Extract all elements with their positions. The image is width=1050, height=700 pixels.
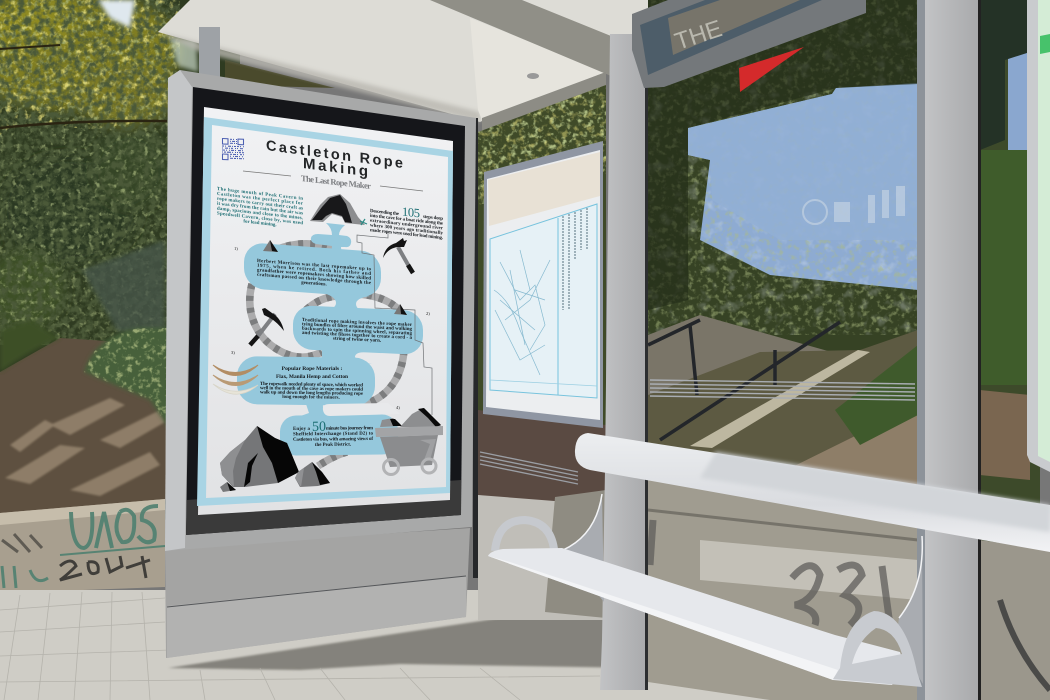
centre shelter column: [600, 34, 648, 690]
poster: steps fact text: extraordinary underground river: [370, 219, 444, 232]
background: paved sidewalk: [0, 590, 1050, 700]
electronic display sign: THE: [672, 15, 726, 56]
poster: connector line: [357, 233, 432, 415]
poster: rock on rope 1 dark side: [270, 240, 278, 252]
poster: traditional rope making text: backwards to spin the spinning wheel, separating: [302, 327, 413, 337]
poster: intro text: damp, spacious and close to the mines.: [217, 207, 304, 221]
poster: bus journey text: Castleton via bus, with amazing views of: [293, 437, 373, 443]
bench back rail: [575, 433, 1050, 552]
roof support post: [199, 27, 220, 77]
poster: Herbert Morrison text: craftsman passed on their knowledge through the: [257, 273, 372, 286]
poster kiosk: base: [165, 528, 470, 658]
poster: steps fact text: where 300 years ago traditionally: [370, 223, 444, 236]
poster: subtitle with rules: The Last Rope Maker: [301, 173, 371, 191]
poster: step number 1: 1): [234, 246, 238, 251]
poster: bus journey text: Enjoy a: [293, 427, 311, 432]
poster: steps fact text: steps deep: [423, 215, 443, 222]
bench seat: [488, 548, 905, 685]
poster: white cut-out between panels: [323, 403, 400, 416]
poster: blue border: [197, 117, 453, 506]
poster: rope materials text: long enough for the miners.: [282, 395, 340, 401]
poster kiosk: frame highlight: [165, 70, 192, 551]
poster: intro text: for lead mining.: [243, 219, 277, 228]
poster kiosk: silver frame: [165, 70, 476, 551]
poster: step number 2: 2): [426, 311, 430, 316]
poster: rope: [250, 244, 404, 466]
poster: traditional rope making text: tying bundles of fibre around the waist and walking: [302, 322, 413, 332]
poster: steps fact text: [370, 201, 444, 241]
poster: small boulder: [295, 462, 330, 487]
poster: traditional rope making text: string of twine or yarn.: [333, 337, 381, 344]
poster: blue connected panels: [237, 223, 423, 456]
poster kiosk: dark glass interior: [186, 87, 465, 535]
poster: bus journey text: the Peak District.: [315, 443, 351, 448]
poster: step number 4: 4): [396, 405, 400, 410]
poster: intro text: [217, 187, 304, 231]
bus shelter roof: [158, 0, 660, 132]
poster: Herbert Morrison text: 1975, when he retired. Both his father and: [257, 264, 371, 277]
red flag: [739, 47, 804, 92]
poster: intro text: rope makers to carry out their craft as: [217, 197, 303, 212]
poster: bus journey text: 50: [312, 420, 326, 435]
background: sloped ground and bush: [0, 320, 175, 514]
background: trees and sky: [0, 0, 335, 520]
poster: cave illustration: [310, 194, 367, 225]
poster: Herbert Morrison text: grandfather were ropemakers showing how skilled: [257, 268, 371, 282]
poster: white sheet: [198, 107, 453, 515]
poster: rock on rope 1: [263, 240, 278, 252]
background: fence: [82, 240, 165, 332]
poster: steps fact text: Descending the: [370, 209, 400, 217]
poster: bus journey text: [293, 419, 374, 448]
poster: rope materials text: The ropewalk needed plenty of space, which worked: [260, 382, 363, 388]
far right ad panel edge: [1027, 0, 1050, 472]
poster: pickaxe lower left: [250, 308, 284, 345]
poster: mine cart with rocks: [375, 408, 443, 474]
poster: steps fact text: made ropes were used for lead mining.: [370, 228, 444, 241]
poster: intro text: Speedwell Cavern, close by, was used: [217, 212, 303, 226]
poster: title: Castleton Rope: [266, 138, 403, 172]
electronic display sign: [632, 0, 866, 88]
poster: Herbert Morrison text: Herbert Morrison was the last ropemaker up to: [257, 259, 372, 272]
poster: rope materials text: walk up and down the long lengths producing rope: [260, 390, 364, 397]
poster: traditional rope making text: [302, 318, 413, 345]
poster: pickaxe upper right: [383, 238, 413, 273]
poster: intro text: Castleton was the perfect place for: [217, 192, 304, 207]
poster: tiny boulder: [220, 482, 236, 492]
poster: rock on rope 2: [394, 304, 407, 315]
poster: title: Making: [303, 155, 368, 180]
glass panel: left section behind map: [478, 85, 606, 620]
bench bracket: left support: [563, 494, 604, 602]
right shelter column: [917, 0, 981, 700]
poster: QR code: [222, 138, 244, 160]
poster: traditional rope making text: Traditional rope making involves the rope maker: [302, 318, 413, 328]
poster: Herbert Morrison text: [257, 259, 372, 291]
poster: rock on rope 2 dark side: [400, 304, 407, 315]
poster: intro text: it was dry from the rain but the air was: [217, 202, 303, 217]
poster: traditional rope making text: and twisting the fibres together to create a cord - a: [302, 331, 413, 341]
poster: bus journey text: minute bus journey from: [326, 426, 373, 432]
glass panel: centre reflection: [648, 0, 920, 700]
left shelter edge: [473, 118, 478, 578]
bench bracket: right support: [896, 536, 923, 684]
poster: rope materials text: [260, 366, 364, 401]
poster: rope materials text: well in the mouth of the cave as rope makers could: [260, 386, 363, 393]
timetable map panel: [483, 141, 603, 428]
poster: steps fact text: 105: [402, 205, 420, 220]
poster: steps fact text: into the cave for a boat ride along the: [370, 214, 444, 227]
bench bracket: right arch: [833, 611, 922, 687]
poster: [197, 107, 453, 515]
poster: rope materials text: Flax, Manila Hemp and Cotton: [276, 374, 348, 380]
poster: subtitle with rules: [243, 171, 423, 191]
background: graffiti stone wall: [0, 499, 165, 593]
poster: bus journey text: Sheffield Interchange (Stand D2) to: [293, 432, 374, 437]
poster: rope materials text: Popular Rope Materials :: [282, 366, 342, 372]
poster: Herbert Morrison text: generations.: [301, 281, 327, 288]
glass panel: far right: [980, 0, 1050, 700]
poster: fibre strands: [213, 365, 258, 394]
poster: step number 3: 3): [231, 350, 235, 355]
poster: intro text: The huge mouth of Peak Cavern in: [217, 187, 303, 202]
poster: large boulder: [220, 426, 299, 487]
bench bracket: left arch: [495, 520, 554, 551]
